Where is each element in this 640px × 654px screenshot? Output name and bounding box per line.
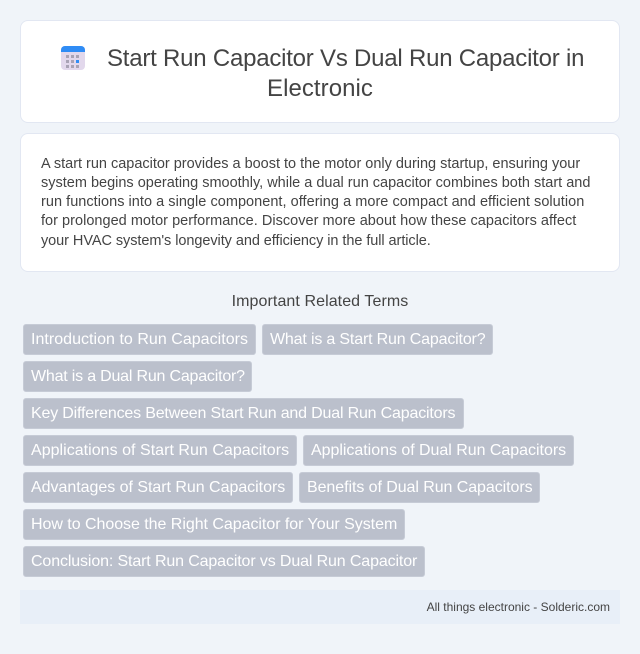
tag	[23, 546, 425, 577]
title: Start Run Capacitor Vs Dual Run Capacitor in	[107, 45, 584, 72]
tag: Key Differences Between Start Run and Dual Run Capacitors	[31, 405, 455, 422]
text: intro paragraph: run functions into a single component, offering a more compact and efficient solution	[41, 194, 584, 210]
tag: Benefits of Dual Run Capacitors	[307, 479, 533, 496]
footer bar	[20, 590, 620, 624]
heading: related terms: Important Related Terms	[232, 293, 408, 310]
tag: What is a Start Run Capacitor?	[270, 331, 485, 348]
footer text: All things electronic - Solderic.com	[427, 600, 610, 614]
title: Electronic	[267, 75, 373, 102]
tag	[23, 435, 297, 466]
text: intro paragraph	[41, 156, 590, 249]
tag	[23, 472, 293, 503]
tag	[23, 324, 256, 355]
tag: How to Choose the Right Capacitor for Your System	[31, 516, 397, 533]
text: intro paragraph: for prolonged motor performance. Discover more about how these capacitors affect	[41, 213, 576, 229]
tag: Introduction to Run Capacitors	[31, 331, 248, 348]
tag	[299, 472, 540, 503]
tag: Applications of Start Run Capacitors	[31, 442, 289, 459]
title	[107, 45, 584, 102]
tag: Applications of Dual Run Capacitors	[311, 442, 566, 459]
tag: What is a Dual Run Capacitor?	[31, 368, 245, 385]
tag	[23, 398, 464, 429]
tag	[23, 361, 252, 392]
text: intro paragraph: system begins operating smoothly, while a dual run capacitor combines both start and	[41, 175, 590, 191]
tag	[303, 435, 574, 466]
tag	[23, 509, 405, 540]
icon: calendar	[61, 46, 85, 70]
text: intro paragraph: your HVAC system's longevity and efficiency in the full article.	[41, 233, 431, 249]
panel: intro text	[20, 133, 620, 272]
text: intro paragraph: A start run capacitor provides a boost to the motor only during startup, ensuring your	[41, 156, 580, 172]
tag list	[23, 324, 574, 577]
tag: Advantages of Start Run Capacitors	[31, 479, 285, 496]
panel: title card	[20, 20, 620, 123]
tag	[262, 324, 493, 355]
tag: Conclusion: Start Run Capacitor vs Dual Run Capacitor	[31, 553, 417, 570]
